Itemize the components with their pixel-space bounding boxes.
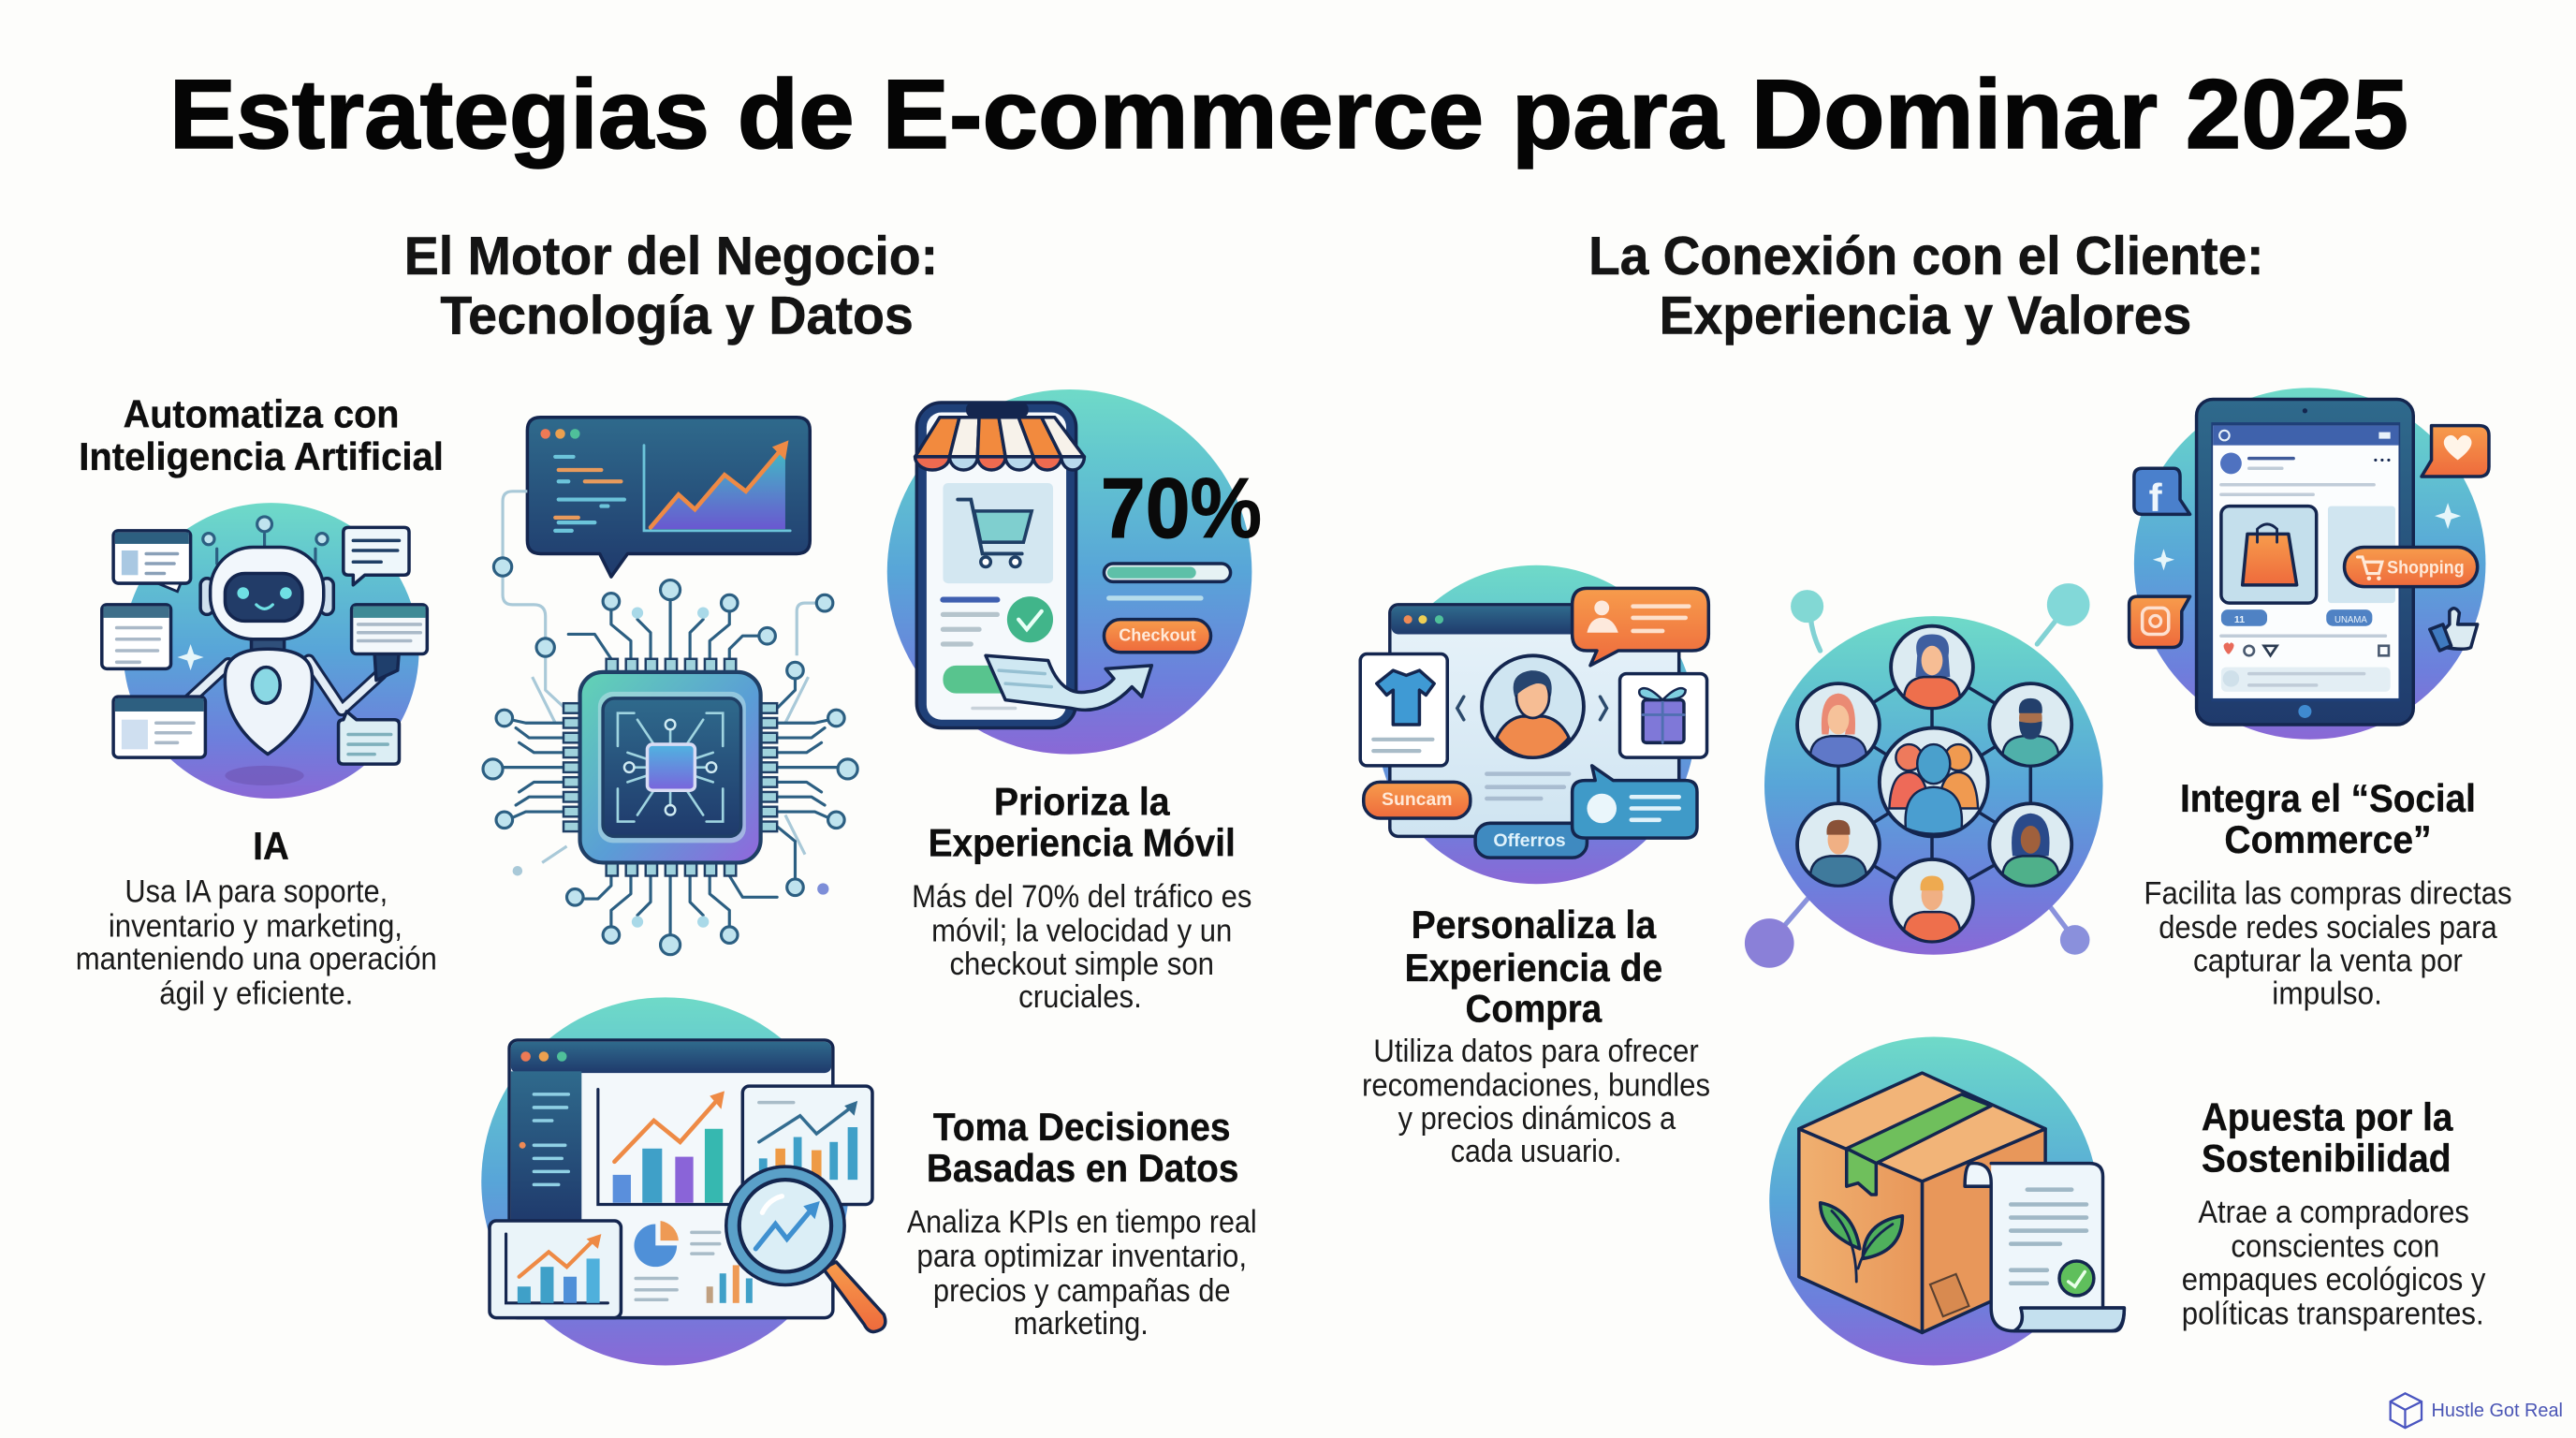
text: social body: impulso. [2272,976,2382,1011]
heading: El Motor del Negocio [404,227,938,345]
icon: tablet with social shopping [2130,388,2489,740]
heading: El Motor del Negocio: El Motor del Negocio: [404,227,938,286]
heading: Personaliza la Experiencia de Compra: Personaliza la [1412,902,1657,946]
text: sostenibilidad body: políticas transparentes. [2182,1297,2484,1332]
heading: Prioriza la Experiencia Móvil: Experiencia Móvil [929,820,1236,864]
text: datos body: para optimizar inventario, [916,1239,1247,1274]
text: sostenibilidad body: empaques ecológicos y [2182,1262,2486,1298]
heading: Apuesta por la Sostenibilidad [2202,1095,2453,1180]
text: social body: Facilita las compras directas [2144,875,2512,911]
icon: analytics dashboard with magnifier [481,997,886,1365]
icon: eco box with receipt [1769,1036,2124,1365]
icon: personalised shop window: Suncam [1382,790,1453,810]
text: datos body: precios y campañas de [933,1273,1231,1309]
icon: tablet with social shopping: UNAMA [2334,615,2367,625]
icon: tablet with social shopping: f [2149,476,2163,520]
heading: La Conexión con el Cliente: La Conexión con el Cliente: [1588,227,2264,286]
text: personaliza body: cada usuario. [1451,1134,1621,1169]
heading: Personaliza la Experiencia de Compra: Experiencia de [1405,946,1662,990]
heading: La Conexión con el Cliente: Experiencia y Valores [1660,286,2191,345]
text: social body: desde redes sociales para [2159,910,2498,946]
watermark: Hustle Got Real: Hustle Got Real [2432,1401,2563,1421]
panel: Integra el Social Commerce [2130,388,2512,1011]
label: 70%: 70% [1101,461,1262,556]
text: personaliza body: y precios dinámicos a [1398,1101,1676,1137]
title: Estrategias de E-commerce para Dominar 2025 [169,60,2408,169]
heading: Personaliza la Experiencia de Compra [1405,902,1662,1031]
heading: Integra el Social Commerce [2180,776,2476,861]
text: sostenibilidad body [2182,1195,2486,1332]
icon: dark code screen bubble with chart [527,418,810,577]
heading: Toma Decisiones Basadas en Datos: Basadas en Datos [927,1146,1238,1190]
text: IA body: Usa IA para soporte, [124,874,388,910]
text: personaliza body: Utiliza datos para ofrecer [1373,1034,1699,1069]
label: IA: IA [253,824,289,868]
text: datos body: marketing. [1014,1306,1149,1342]
icon: customer community network [1745,583,2103,968]
heading: La Conexión con el Cliente [1588,227,2264,345]
panel: Prioriza la Experiencia Móvil [887,389,1262,1015]
text: social body: capturar la venta por [2193,943,2463,978]
heading: Toma Decisiones Basadas en Datos: Toma Decisiones [933,1105,1231,1149]
text: social body [2144,875,2512,1011]
heading: Integra el Social Commerce: Integra el “Social [2180,776,2476,820]
text: IA body: manteniendo una operación [76,942,437,977]
heading: Prioriza la Experiencia Móvil [929,780,1236,864]
heading: Prioriza la Experiencia Móvil: Prioriza la [994,780,1170,824]
icon: tablet with social shopping: Shopping [2387,559,2465,579]
heading: Apuesta por la Sostenibilidad: Sostenibilidad [2202,1136,2452,1180]
text: datos body [907,1204,1257,1342]
heading: Integra el Social Commerce: Commerce” [2224,817,2432,861]
icon: phone storefront with checkout [887,389,1262,755]
heading: El Motor del Negocio: Tecnología y Datos [440,286,914,345]
icon: personalised shop window: Offerros [1493,831,1566,851]
text: móvil body: móvil; la velocidad y un [931,914,1232,949]
heading: Automatiza con Inteligencia Artificial [79,391,444,478]
text: móvil body [912,879,1251,1015]
text: IA body [76,874,437,1011]
panel: Apuesta por la Sostenibilidad [1769,1036,2486,1365]
panel: Personaliza la Experiencia de Compra [1360,565,1710,1169]
heading: Toma Decisiones Basadas en Datos [927,1105,1238,1190]
text: datos body: Analiza KPIs en tiempo real [907,1204,1257,1240]
heading: Automatiza con Inteligencia Artificial: Inteligencia Artificial [79,434,444,478]
text: personaliza body [1362,1034,1710,1169]
text: personaliza body: recomendaciones, bundles [1362,1068,1710,1104]
text: sostenibilidad body: Atrae a compradores [2198,1195,2469,1230]
icon: tablet with social shopping: 11 [2234,614,2245,625]
text: móvil body: checkout simple son [949,946,1214,982]
heading: Personaliza la Experiencia de Compra: Compra [1466,987,1603,1031]
heading: Apuesta por la Sostenibilidad: Apuesta por la [2202,1095,2453,1139]
text: IA body: inventario y marketing, [109,908,402,944]
panel: Toma Decisiones Basadas en Datos [481,997,1257,1365]
text: móvil body: Más del 70% del tráfico es [912,879,1251,915]
icon: robot with cards [102,503,427,799]
icon: circuit chip [483,492,857,955]
icon: personalised shop window [1360,565,1708,884]
text: sostenibilidad body: conscientes con [2231,1229,2439,1265]
icon: phone storefront with checkout: Checkout [1119,624,1196,644]
text: móvil body: cruciales. [1018,979,1142,1015]
heading: Automatiza con Inteligencia Artificial: Automatiza con [124,391,399,435]
text: IA body: ágil y eficiente. [159,976,353,1011]
watermark: Hustle Got Real [2391,1393,2563,1428]
panel: Automatiza con IA [76,391,444,1011]
